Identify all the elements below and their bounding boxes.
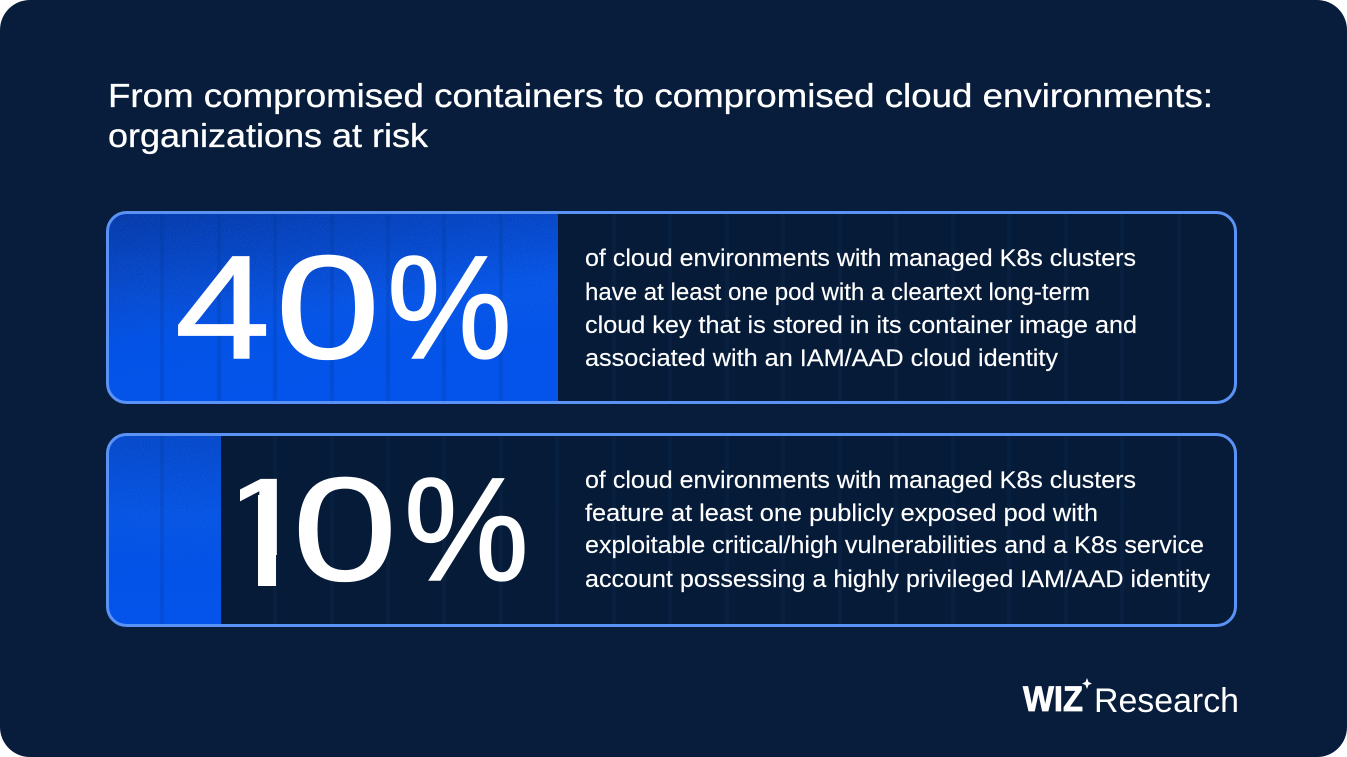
big number: 40% xyxy=(175,225,512,390)
big number: 10% xyxy=(240,476,525,586)
big number: 10%: 1 xyxy=(209,448,320,612)
description: 40% stat: of cloud environments with managed K8s clusters xyxy=(585,245,1136,272)
description: 10% stat: account possessing a highly privileged IAM/AAD identity xyxy=(585,566,1210,593)
description: 40% stat: cloud key that is stored in its container image and xyxy=(585,312,1137,339)
icon: sparkle xyxy=(1082,678,1092,689)
title xyxy=(108,77,1213,154)
logo: WIZ Research xyxy=(1023,678,1239,720)
panel: 40% stat xyxy=(107,212,1236,403)
logo wordmark: WIZ xyxy=(1023,680,1083,719)
description: 40% stat xyxy=(585,245,1137,372)
title: From compromised containers to compromised cloud environments: xyxy=(108,77,1213,114)
description: 10% stat: exploitable critical/high vulnerabilities and a K8s service xyxy=(585,532,1204,559)
description: 40% stat: have at least one pod with a cleartext long-term xyxy=(585,279,1090,306)
blue progress bar: 40% xyxy=(107,212,558,403)
description: 10% stat: of cloud environments with managed K8s clusters xyxy=(585,467,1136,494)
big number: 40%: 0 xyxy=(276,225,380,389)
panel border xyxy=(108,434,1236,626)
big number: 10%: 0 xyxy=(292,447,397,611)
title: organizations at risk xyxy=(108,117,429,154)
blue progress bar: 10% xyxy=(107,434,221,626)
description: 10% stat xyxy=(585,467,1210,593)
panel border xyxy=(108,212,1236,402)
big number: 40%: 4 xyxy=(175,225,270,389)
logo label: Research xyxy=(1094,682,1239,720)
big number: 10%: % xyxy=(404,448,529,612)
description: 10% stat: feature at least one publicly exposed pod with xyxy=(585,500,1098,527)
panel: 10% stat xyxy=(107,434,1236,626)
big number: 40%: % xyxy=(387,226,512,390)
description: 40% stat: associated with an IAM/AAD cloud identity xyxy=(585,345,1058,372)
